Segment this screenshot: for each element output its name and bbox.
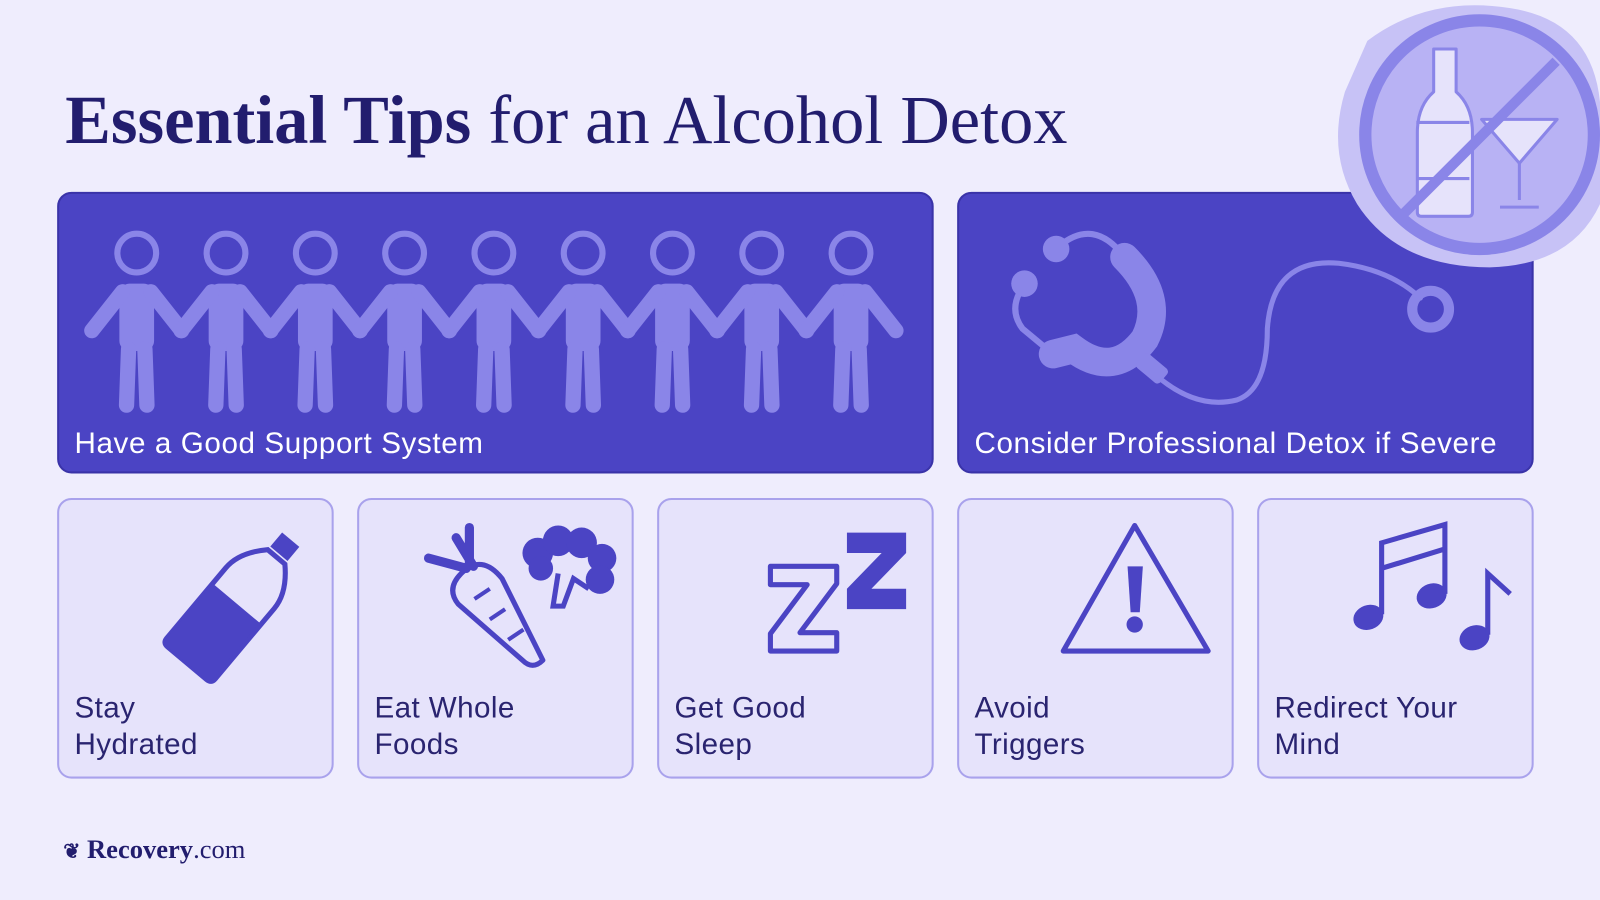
panel: professional detox: Consider Professional Detox if Severe <box>974 428 1497 460</box>
icon: stethoscope <box>1011 230 1454 405</box>
icon: warning <box>1060 523 1211 654</box>
icon: bottle <box>162 532 300 684</box>
icon: Zz <box>768 532 906 654</box>
card: whole foods <box>357 498 634 779</box>
panel: support system: Have a Good Support System <box>74 428 484 460</box>
card: hydrated: Stay <box>74 692 135 724</box>
card: hydrated <box>57 498 334 779</box>
card: sleep: Sleep <box>674 729 752 761</box>
card: triggers: Avoid <box>974 692 1050 724</box>
panel: support system <box>57 192 934 473</box>
card: redirect mind: Mind <box>1274 729 1340 761</box>
card: redirect mind: Redirect Your <box>1274 692 1457 724</box>
card: sleep <box>657 498 934 779</box>
card: triggers <box>957 498 1234 779</box>
card: hydrated: Hydrated <box>74 729 198 761</box>
title: Essential Tips for an Alcohol Detox <box>65 83 1067 158</box>
icon: people chain <box>84 230 904 413</box>
icon: music notes <box>1353 521 1512 650</box>
card: triggers: Triggers <box>974 729 1085 761</box>
logo: ❦ Recovery.com <box>63 835 245 864</box>
card: sleep: Get Good <box>674 692 806 724</box>
icon: carrot and broccoli <box>424 523 616 668</box>
card: redirect mind <box>1257 498 1534 779</box>
panel: professional detox <box>957 192 1534 473</box>
icon: no alcohol badge <box>1338 5 1600 268</box>
card: whole foods: Eat Whole <box>374 692 515 724</box>
card: whole foods: Foods <box>374 729 459 761</box>
